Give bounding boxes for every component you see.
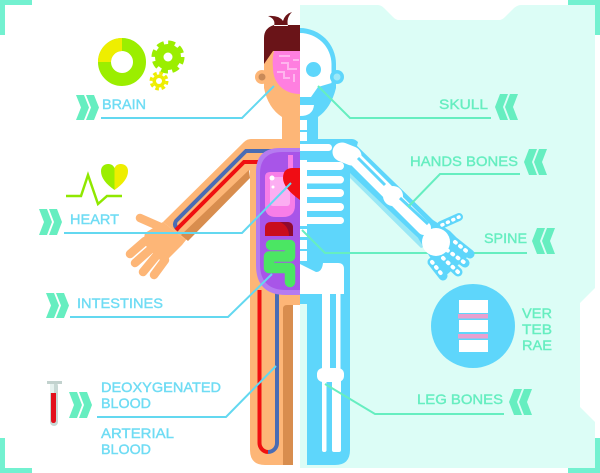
label: deoxygenated and arterial blood: BLOOD (101, 441, 151, 457)
inner arm shade (181, 170, 250, 241)
label: hands bones (408, 149, 547, 207)
skeleton arm (342, 139, 472, 278)
label: intestines (46, 274, 272, 318)
organ: heart (283, 168, 300, 200)
label: vertebrae: RAE (522, 337, 552, 353)
brain (273, 51, 300, 94)
torso and leg (163, 139, 300, 465)
hand (130, 218, 186, 275)
skull ear (330, 70, 344, 84)
label: leg bones (325, 384, 532, 415)
organ: liver (265, 222, 293, 236)
label: vertebrae: VER (522, 305, 552, 321)
spine (300, 229, 307, 261)
leg bones (317, 290, 344, 452)
neck vertebrae (300, 120, 307, 141)
pelvis (300, 263, 344, 294)
icon: heart (101, 164, 128, 190)
label: skull: SKULL (439, 96, 488, 112)
label: brain: BRAIN (102, 96, 146, 112)
torso bones (300, 139, 358, 465)
teeth (300, 105, 314, 116)
ear (255, 70, 269, 84)
inner leg shade (283, 305, 293, 465)
label: spine: SPINE (484, 230, 527, 246)
icon: yellow gear (151, 73, 167, 89)
eye socket (306, 62, 321, 77)
label: skull (318, 86, 518, 120)
icon: donut chart (98, 38, 140, 80)
label: deoxygenated and arterial blood: DEOXYGENATED (101, 379, 221, 395)
hair (264, 12, 300, 64)
label: deoxygenated and arterial blood: ARTERIAL (101, 425, 174, 441)
arm veins (175, 151, 273, 230)
finger bones (432, 242, 470, 276)
icon: blood test tube (47, 381, 62, 426)
upper arm bone (342, 152, 393, 197)
skull (300, 28, 336, 139)
panel: skeleton background (300, 5, 595, 468)
label: brain (76, 86, 274, 120)
label: intestines: INTESTINES (77, 295, 163, 311)
elbow (383, 186, 403, 206)
wrist bone (422, 228, 450, 256)
label: spine (484, 228, 555, 254)
label: heart (39, 183, 291, 235)
label: heart: HEART (70, 211, 119, 227)
leader: spine (302, 230, 527, 253)
skeleton (300, 28, 358, 465)
blue arm (350, 139, 472, 278)
label: leg bones: LEG BONES (417, 391, 503, 407)
label: vertebrae: TEB (522, 321, 552, 337)
forearm bones (393, 197, 428, 228)
label: deoxygenated and arterial blood: BLOOD (101, 395, 151, 411)
organ: intestines (269, 245, 290, 282)
ribs (300, 144, 344, 226)
label: hands bones: HANDS BONES (410, 153, 518, 169)
vertebrae circle (431, 284, 515, 368)
icon: heartbeat line (66, 175, 122, 204)
arm shadow (350, 172, 426, 248)
head (264, 28, 300, 139)
internal organs (256, 148, 300, 295)
organ: stomach (265, 155, 295, 217)
thumb bones (441, 217, 459, 225)
label: deoxygenated and arterial blood (69, 366, 276, 457)
human body: skin side (130, 12, 300, 465)
leg veins (259, 290, 277, 452)
label: vertebrae (522, 305, 552, 353)
icon: green gear (154, 42, 182, 72)
